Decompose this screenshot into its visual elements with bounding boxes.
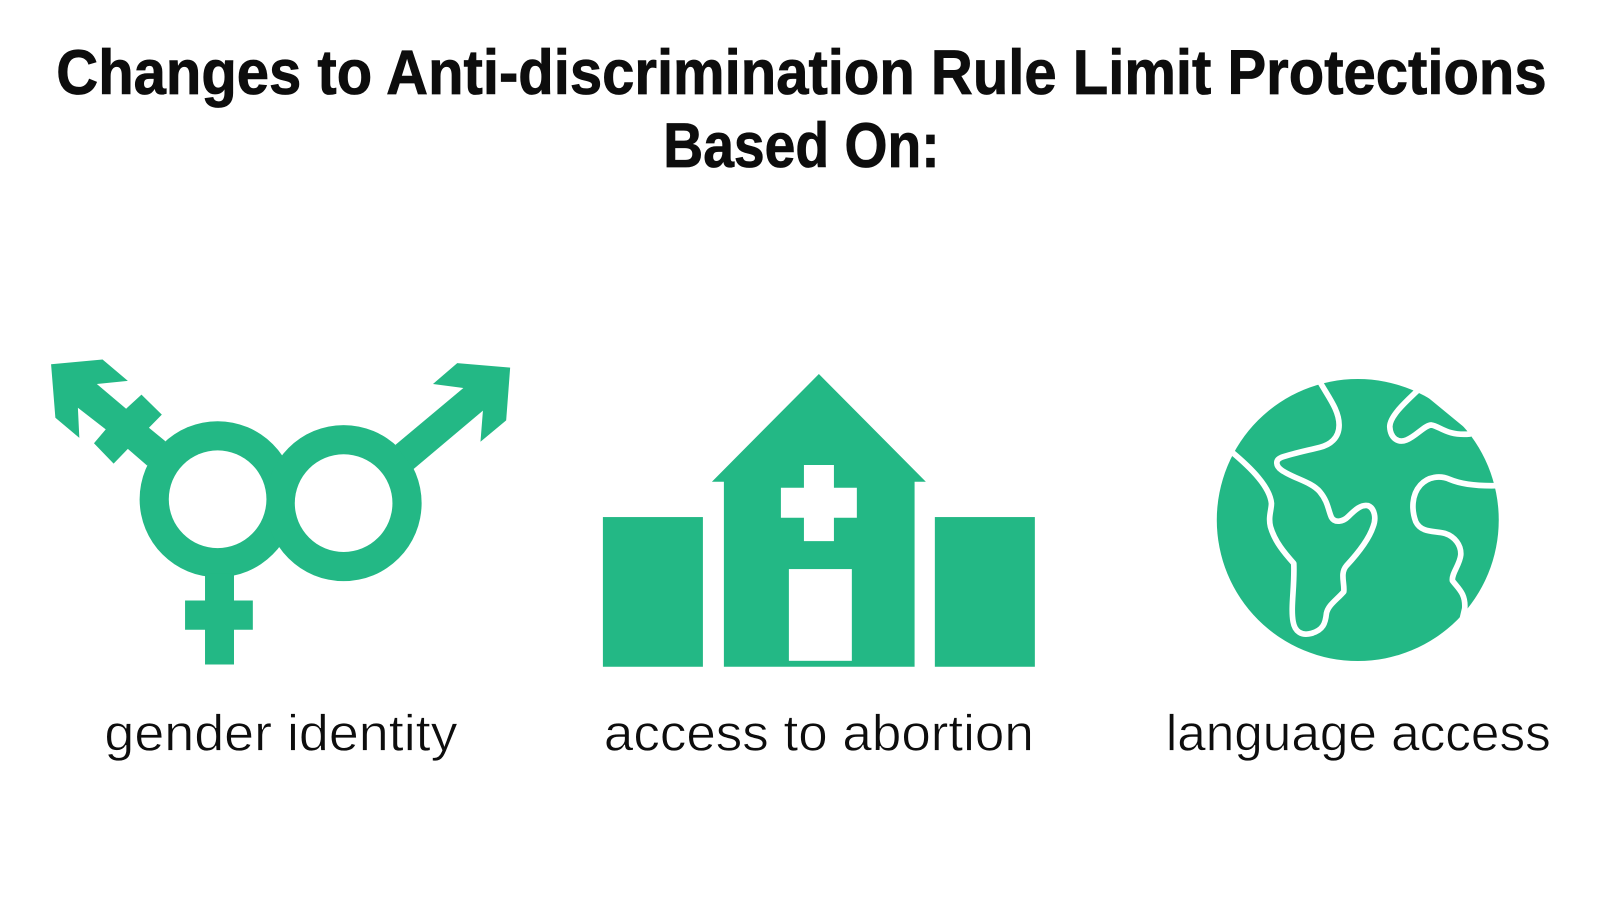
label: language access: language access — [1166, 705, 1551, 762]
label: access to abortion: access to abortion — [604, 705, 1034, 762]
icon: hospital building — [603, 374, 1035, 667]
icon: globe — [1217, 379, 1499, 661]
label: gender identity: gender identity — [104, 705, 458, 762]
icon: gender symbol — [51, 359, 510, 665]
title: Based On: — [663, 111, 940, 181]
title — [56, 38, 1547, 181]
